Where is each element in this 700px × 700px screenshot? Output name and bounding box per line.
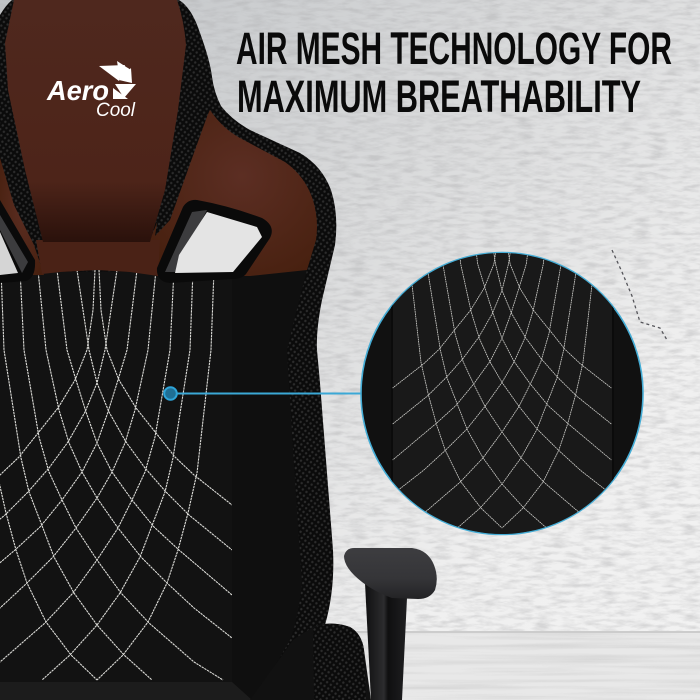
wall crack [612, 250, 667, 340]
chair mesh shell [0, 0, 336, 700]
side bolster [250, 624, 371, 700]
circle base [361, 252, 643, 534]
armrest post [365, 583, 407, 700]
callout: connector line [177, 392, 362, 394]
floor [300, 631, 700, 700]
stitching: quilted pattern [0, 270, 232, 680]
headrest brown panel [5, 0, 186, 242]
armrest pad [344, 548, 437, 599]
headrest left mesh [0, 40, 36, 236]
backrest centre and side panels [0, 270, 307, 700]
left shoulder brown panel [0, 158, 44, 275]
circle centre panel [392, 250, 613, 540]
stitched panel [0, 272, 232, 682]
headrest right mesh [155, 8, 213, 236]
logo pinwheel [99, 61, 136, 99]
seat cushion [0, 682, 252, 700]
circle stitching [392, 253, 612, 528]
callout: marker dot [164, 387, 177, 400]
right headrest slot [157, 200, 272, 283]
title [236, 23, 672, 122]
brown band under headrest [36, 240, 160, 276]
logo: AeroCool [46, 61, 136, 121]
right shoulder brown panel [150, 110, 317, 276]
armrest [344, 548, 437, 700]
logo wordmark: Aero [46, 75, 109, 106]
left headrest slot [0, 200, 35, 283]
logo: AeroCool: Cool [96, 100, 136, 121]
gaming chair [0, 0, 371, 700]
magnified detail circle [360, 252, 644, 536]
